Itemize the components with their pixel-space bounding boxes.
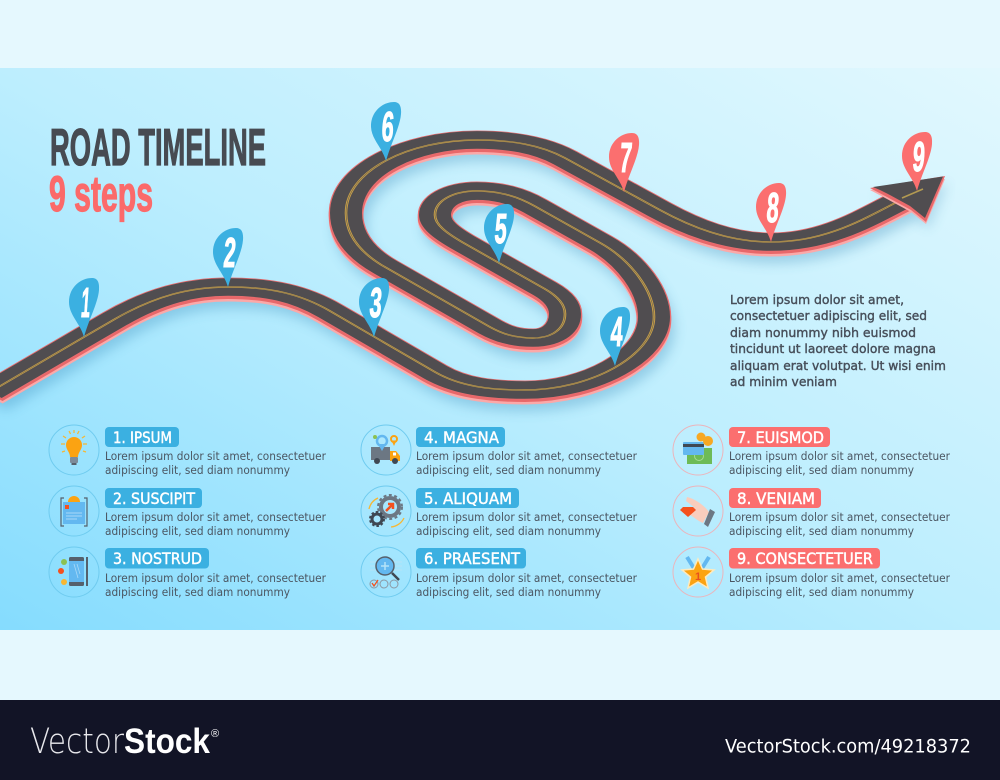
description: Lorem ipsum dolor sit amet, consectetuer: [105, 510, 326, 524]
pin 5: 5: [493, 205, 509, 252]
icon: light bulb: [49, 425, 99, 475]
label: 2. SUSCIPIT: [113, 489, 195, 508]
step 2: [49, 486, 326, 538]
pin 9: [902, 132, 932, 191]
description: Lorem ipsum dolor sit amet, consectetuer: [729, 510, 950, 524]
description: [105, 571, 326, 599]
pin 8: 8: [765, 184, 781, 231]
footer logo: [30, 722, 219, 762]
label: 7. EUISMOD: [737, 428, 824, 447]
description: [416, 449, 637, 477]
description paragraph: diam nonummy nibh euismod: [730, 325, 916, 340]
title: ROAD TIMELINE: [50, 119, 266, 177]
description: [105, 449, 326, 477]
pin 1: [69, 278, 99, 337]
footer logo: Stock: [124, 722, 210, 761]
label: 4. MAGNA: [424, 428, 499, 447]
pin 7: [609, 133, 639, 192]
description paragraph: consectetuer adipiscing elit, sed: [730, 308, 927, 323]
description paragraph: tincidunt ut laoreet dolore magna: [730, 341, 936, 356]
pin 4: 4: [609, 308, 625, 355]
description: Lorem ipsum dolor sit amet, consectetuer: [105, 571, 326, 585]
description: Lorem ipsum dolor sit amet, consectetuer: [416, 571, 637, 585]
description: Lorem ipsum dolor sit amet, consectetuer: [729, 449, 950, 463]
description: Lorem ipsum dolor sit amet, consectetuer: [416, 510, 637, 524]
icon: magnifier: [361, 547, 411, 597]
label: 8. VENIAM: [737, 489, 815, 508]
label: 6. PRAESENT: [424, 549, 520, 568]
description: adipiscing elit, sed diam nonummy: [416, 585, 601, 599]
icon: smartphone: [49, 547, 99, 597]
icon: hand with gem: [673, 486, 723, 536]
winding road: [0, 140, 948, 404]
icon: clipboard: [49, 486, 99, 536]
icon: gears: [361, 486, 411, 536]
title: 9 steps: [49, 166, 153, 222]
pin 1: 1: [80, 279, 92, 326]
icon: star medal: [673, 547, 723, 597]
pin 3: 3: [368, 279, 384, 326]
footer logo: ®: [211, 728, 219, 740]
pin 3: [359, 278, 389, 337]
step 9: [673, 547, 950, 599]
pin 9: 9: [911, 133, 927, 180]
label: 3. NOSTRUD: [113, 549, 202, 568]
pin 8: [756, 183, 786, 242]
label: 9. CONSECTETUER: [737, 549, 873, 568]
description: adipiscing elit, sed diam nonummy: [105, 524, 290, 538]
icon: star medal: 1: [695, 571, 701, 583]
pin 7: 7: [618, 134, 634, 181]
description: [729, 449, 950, 477]
description: [729, 571, 950, 599]
pin 5: [484, 204, 514, 263]
footer logo: Vector: [30, 722, 125, 762]
description: adipiscing elit, sed diam nonummy: [416, 463, 601, 477]
description: Lorem ipsum dolor sit amet, consectetuer: [105, 449, 326, 463]
step 4: [361, 425, 637, 477]
icon: card and money: [673, 425, 723, 475]
title: [49, 119, 266, 222]
footer bar: [0, 700, 1000, 780]
pin 6: [371, 102, 401, 161]
pin 6: 6: [380, 103, 396, 150]
step 8: [673, 486, 950, 538]
description paragraph: ad minim veniam: [730, 374, 837, 389]
pin 4: [600, 307, 630, 366]
label: 5. ALIQUAM: [424, 489, 512, 508]
description: adipiscing elit, sed diam nonummy: [105, 585, 290, 599]
description: [416, 510, 637, 538]
step 1: [49, 425, 326, 477]
description paragraph: Lorem ipsum dolor sit amet,: [730, 292, 904, 307]
description: [416, 571, 637, 599]
description: [105, 510, 326, 538]
description: [729, 510, 950, 538]
description paragraph: [730, 292, 946, 389]
description: adipiscing elit, sed diam nonummy: [105, 463, 290, 477]
label: 1. IPSUM: [113, 428, 172, 447]
step 5: [361, 486, 637, 538]
description: Lorem ipsum dolor sit amet, consectetuer: [416, 449, 637, 463]
step 3: [49, 547, 326, 599]
description paragraph: aliquam erat volutpat. Ut wisi enim: [730, 358, 946, 373]
pin 2: [213, 228, 243, 287]
description: adipiscing elit, sed diam nonummy: [729, 463, 914, 477]
description: Lorem ipsum dolor sit amet, consectetuer: [729, 571, 950, 585]
description: adipiscing elit, sed diam nonummy: [729, 585, 914, 599]
description: adipiscing elit, sed diam nonummy: [416, 524, 601, 538]
footer image id: VectorStock.com/49218372: [725, 736, 971, 758]
step 7: [673, 425, 950, 477]
description: adipiscing elit, sed diam nonummy: [729, 524, 914, 538]
icon: delivery truck: [361, 425, 411, 475]
step 6: [361, 547, 637, 599]
background panel: [0, 68, 1000, 630]
pin 2: 2: [222, 229, 238, 276]
road arrow head: [870, 176, 945, 224]
